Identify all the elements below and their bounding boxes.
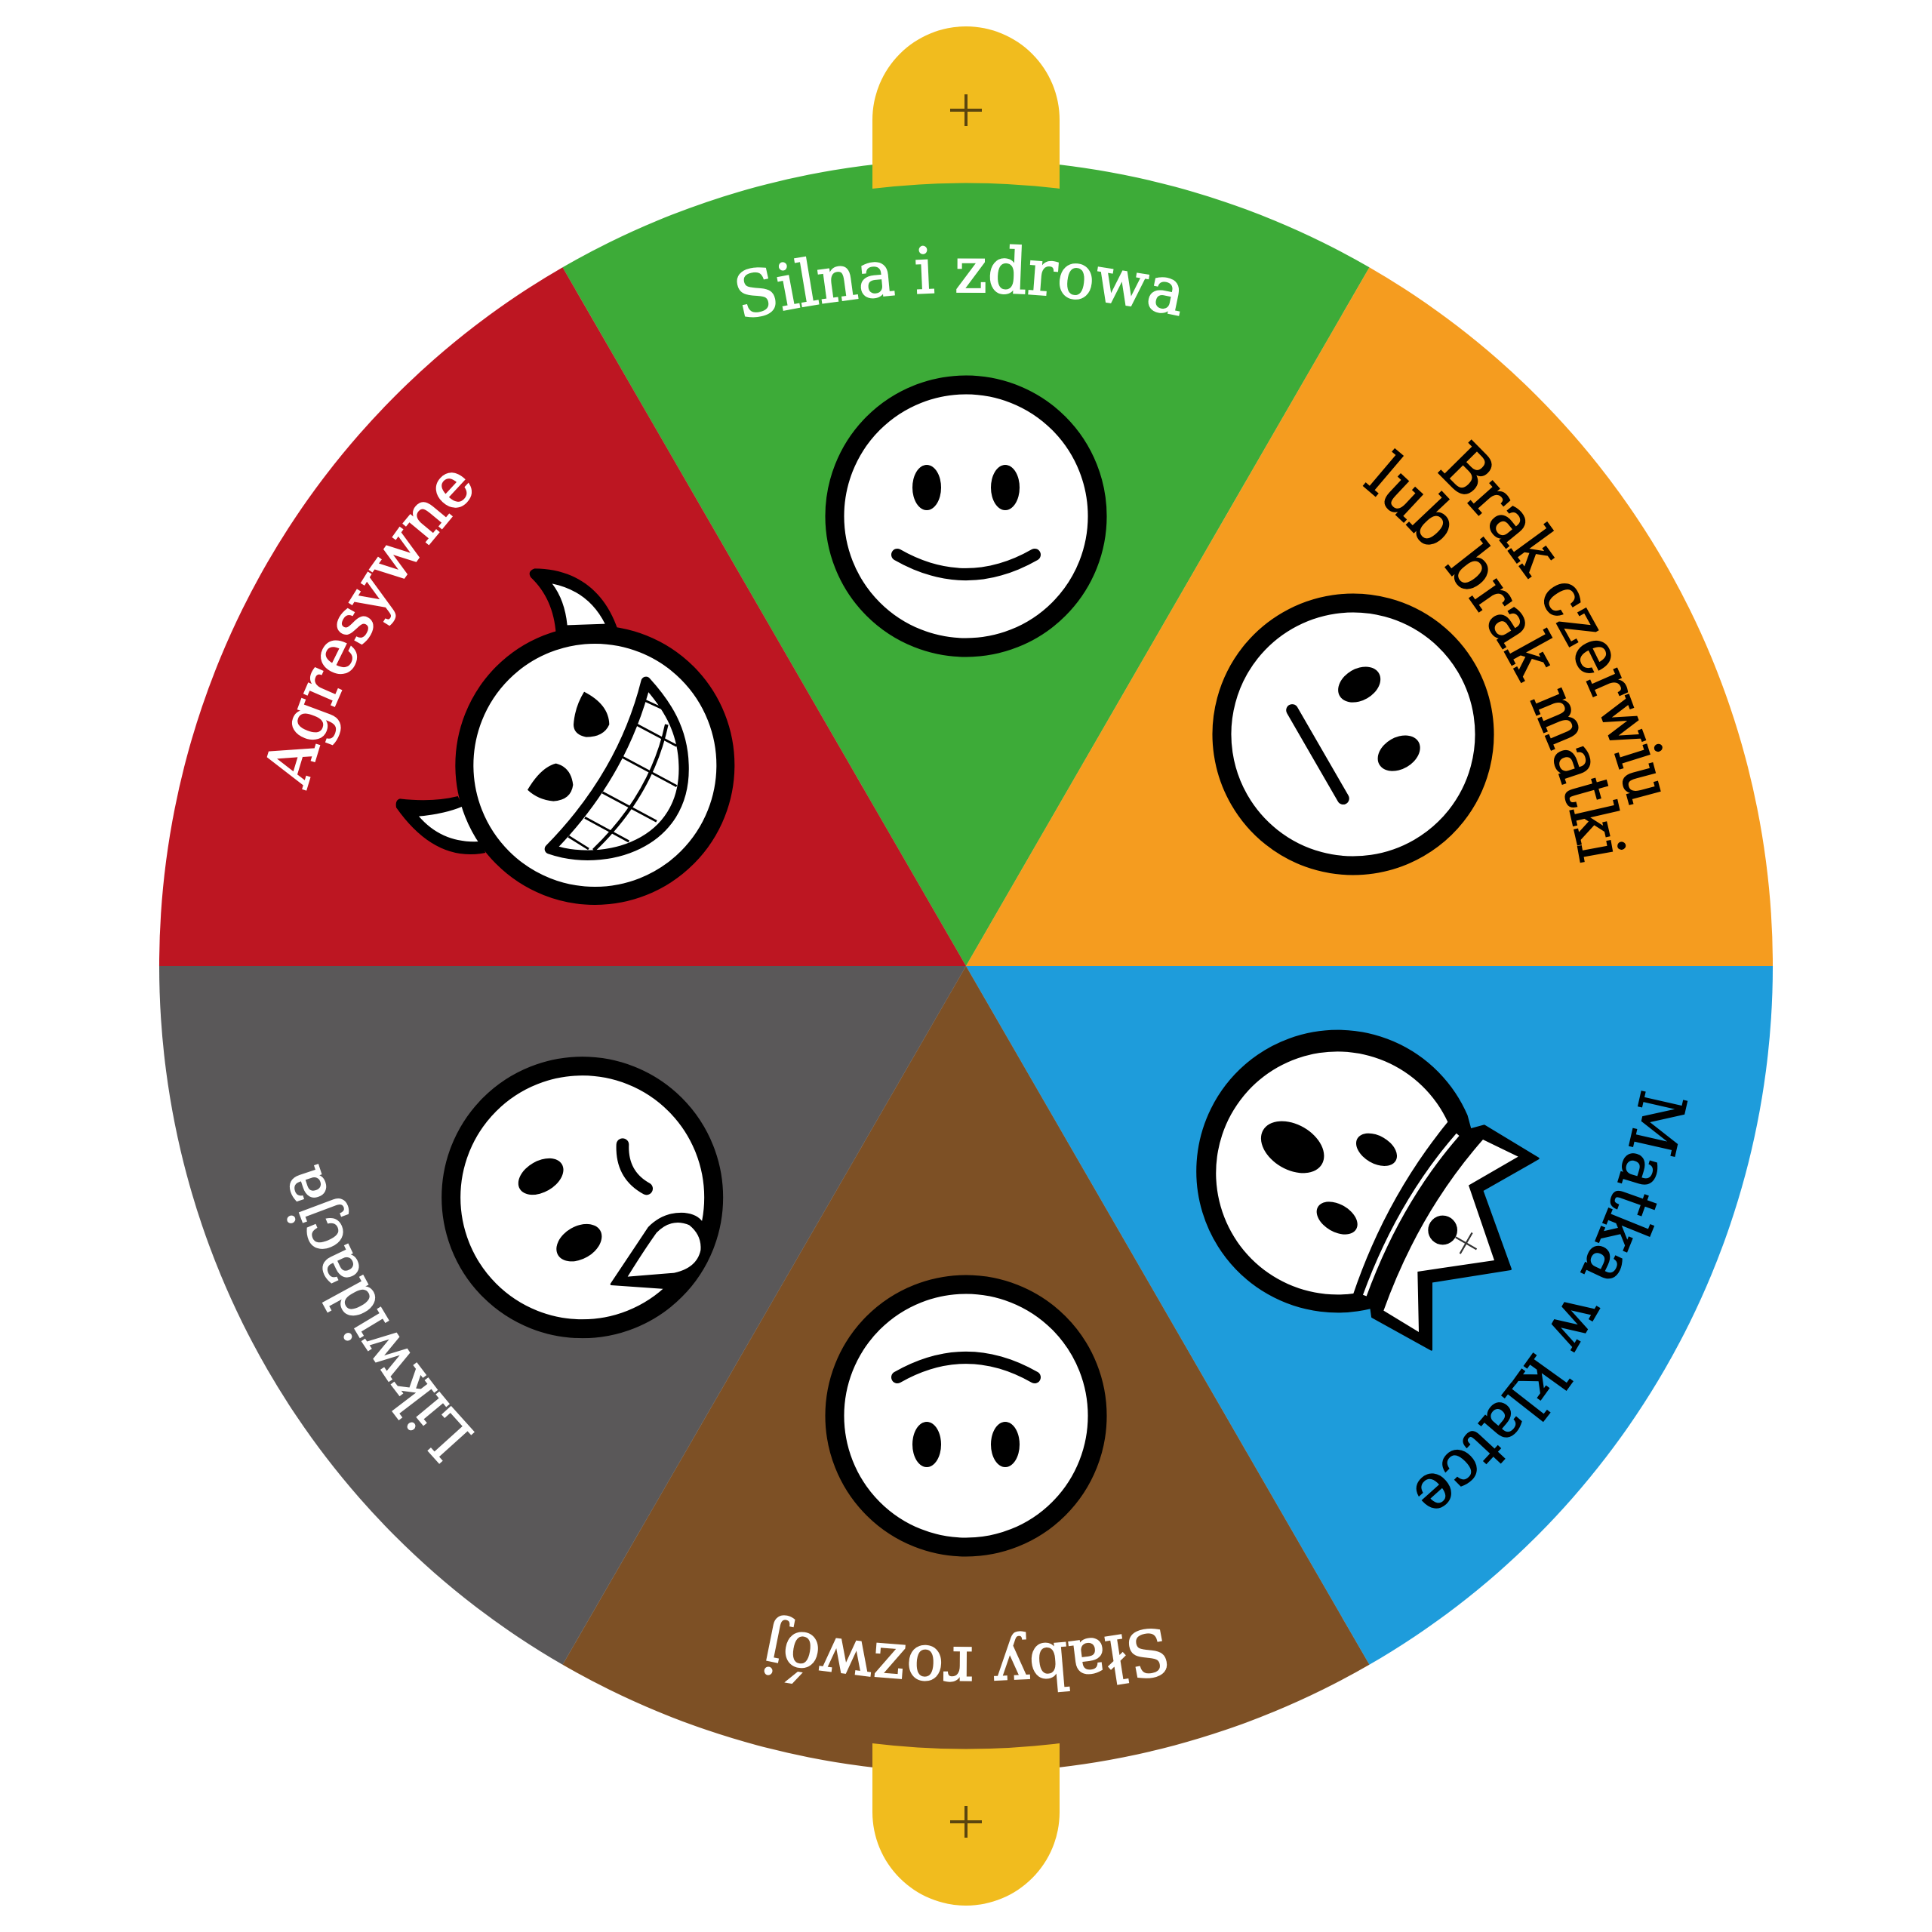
panel: Słaby rozwój (brown): [563, 966, 1369, 1767]
label: Silna i zdrowa: Silna i zdrowa: [737, 245, 1180, 317]
brown wedge: [563, 966, 1369, 1773]
icon: grinning devil face: [396, 568, 725, 896]
label: Agresywne: Agresywne: [267, 472, 472, 791]
icon: face with queen crown: [1198, 1031, 1538, 1349]
icon: upside-down smiling face: [835, 1284, 1097, 1547]
blue wedge: [764, 617, 1866, 1718]
panel: Agresywne (red): [158, 267, 966, 966]
icon: face with tongue out: [451, 1066, 714, 1329]
icon: neutral face: [1174, 555, 1533, 914]
label: Brak czerwiu lub brak matki: Brak czerwiulub brak matki: [1363, 439, 1663, 863]
top yellow tab: [872, 26, 1060, 189]
red wedge: [66, 214, 1168, 1315]
icon: plus mark: [950, 94, 982, 126]
label: Matka w klatce: Matka w klatce: [1416, 1091, 1687, 1509]
grey wedge: [66, 617, 1168, 1718]
panel: Matka w klatce (blue): [966, 966, 1773, 1665]
orange wedge: [764, 214, 1866, 1315]
green wedge: [563, 159, 1369, 966]
icon: plus mark: [950, 1806, 982, 1838]
icon: smiling face: [835, 385, 1097, 648]
panel: Brak czerwiu lub brak matki (orange): [966, 267, 1773, 966]
bottom yellow tab: [872, 1743, 1060, 1906]
label: Likwidacja: Likwidacja: [287, 1164, 475, 1464]
panel: Likwidacja (grey): [159, 966, 966, 1665]
panel: Silna i zdrowa (green): [563, 165, 1369, 966]
label: Słaby rozwój: Słaby rozwój: [764, 1615, 1167, 1692]
